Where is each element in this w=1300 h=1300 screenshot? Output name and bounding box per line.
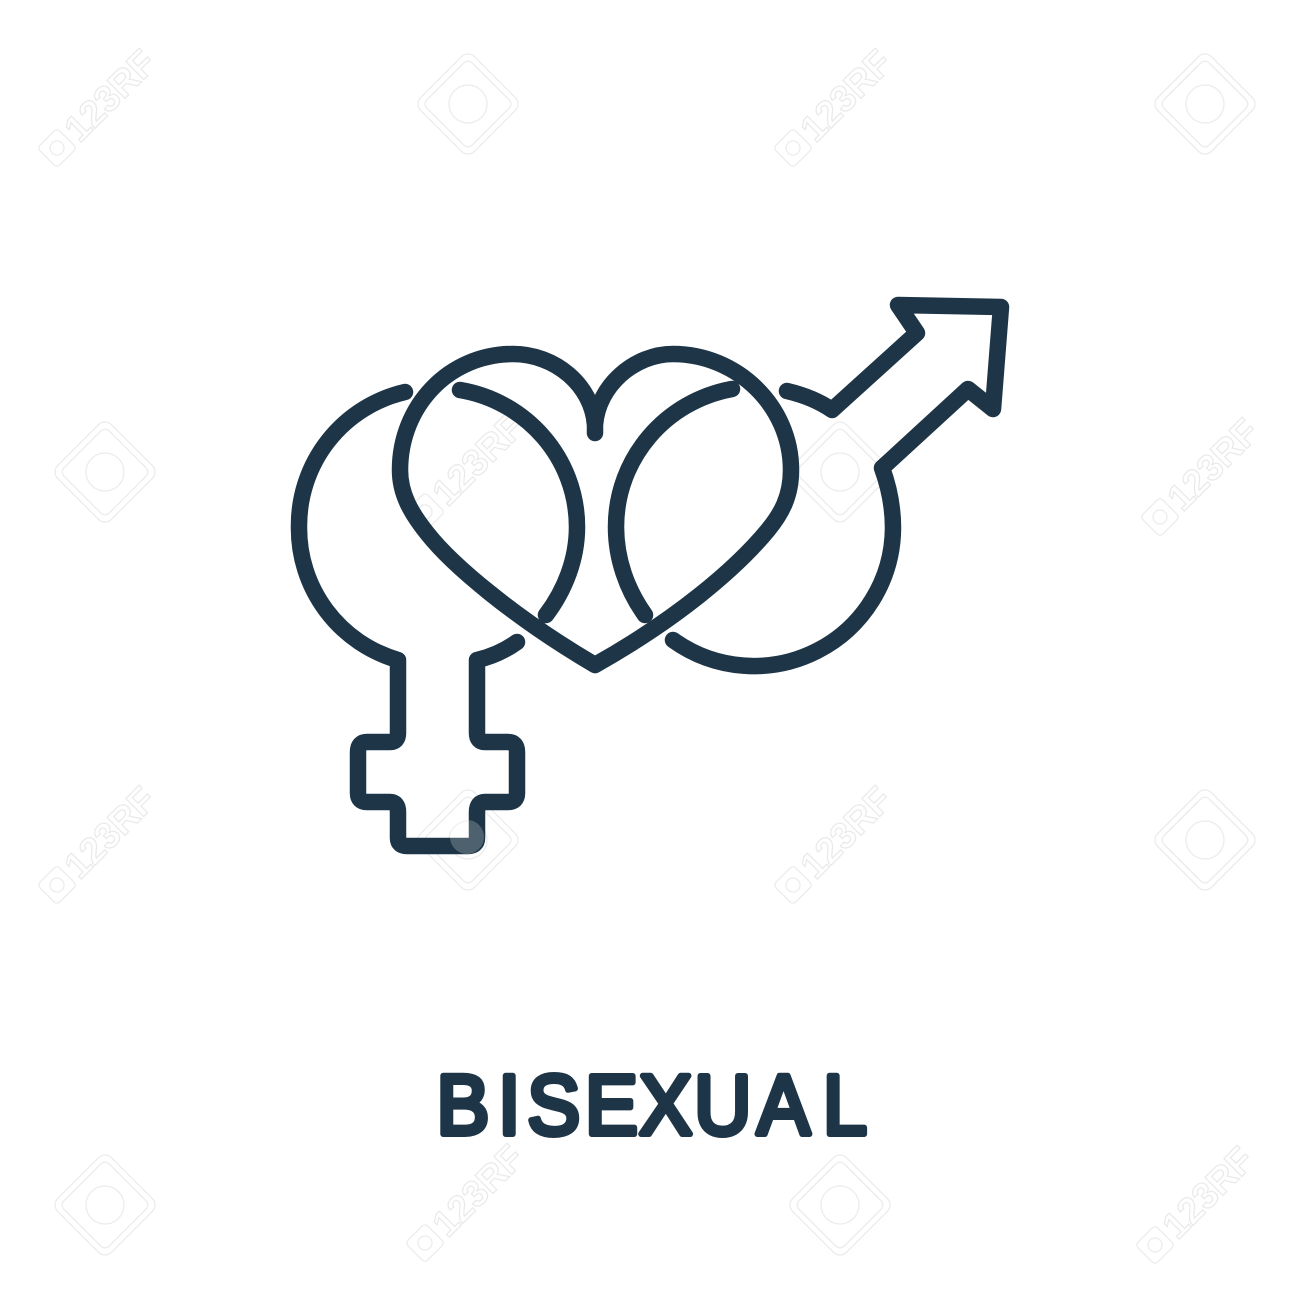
watermark pattern: 123RF: [1159, 411, 1267, 518]
watermark pattern: 123RF: [792, 42, 900, 149]
icon: inner right petal: [616, 389, 732, 615]
icon: inner left petal: [460, 390, 577, 615]
watermark pattern: 123RF: [424, 1137, 532, 1244]
watermark pattern: 123RF: [1154, 1139, 1262, 1246]
icon: male symbol: [673, 305, 1001, 666]
icon: female symbol: [299, 392, 517, 846]
watermark pattern: 123RF: [792, 779, 900, 886]
watermark pattern: 123RF: [56, 779, 164, 886]
watermark pattern: 123RF: [56, 42, 164, 149]
icon: bisexual symbol: [299, 305, 1001, 846]
icon: heart: [400, 354, 791, 665]
title: BISEXUAL: [437, 1059, 867, 1153]
watermark pattern: 123RF: [424, 406, 532, 513]
